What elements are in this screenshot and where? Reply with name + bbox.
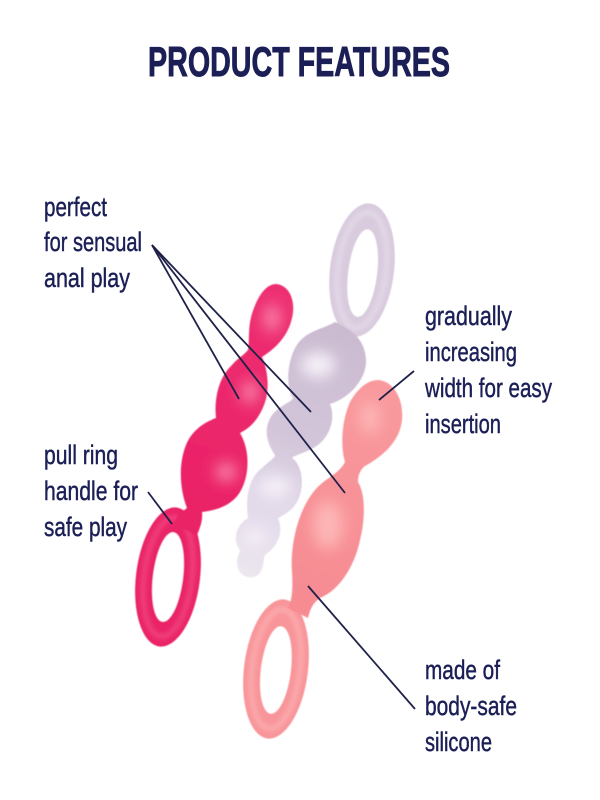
label: gradually increasing width for easy insertion: increasing: [425, 337, 517, 367]
label: pull ring handle for safe play: safe play: [44, 512, 127, 542]
leader line: pull ring handle: [148, 492, 172, 524]
label: perfect for sensual anal play: [44, 192, 142, 293]
label: gradually increasing width for easy insertion: gradually: [425, 301, 512, 331]
product: salmon plug: [236, 380, 402, 742]
magenta highlights: [215, 304, 281, 482]
label: made of body-safe silicone: made of: [425, 655, 500, 685]
label: perfect for sensual anal play: perfect: [44, 192, 107, 222]
magenta pull ring: [128, 504, 208, 650]
label: perfect for sensual anal play: for sensual: [44, 227, 142, 257]
product: lilac twisted plug: [236, 200, 402, 577]
label: made of body-safe silicone: [425, 655, 517, 757]
lilac highlights: [244, 352, 335, 546]
salmon highlights: [313, 402, 380, 549]
label: made of body-safe silicone: body-safe: [425, 691, 517, 721]
salmon body: [288, 380, 402, 618]
lilac twisted body: [236, 322, 366, 577]
label: pull ring handle for safe play: [44, 440, 138, 542]
leader line: gradually increasing width: [379, 371, 414, 400]
salmon pull ring: [236, 596, 316, 742]
label: gradually increasing width for easy insertion: insertion: [425, 409, 501, 439]
leader lines: perfect for sensual anal play: [152, 245, 345, 493]
magenta body: [175, 284, 293, 535]
label: gradually increasing width for easy insertion: [424, 301, 552, 439]
label: pull ring handle for safe play: handle for: [44, 476, 138, 506]
label: made of body-safe silicone: silicone: [425, 727, 492, 757]
label: pull ring handle for safe play: pull ring: [44, 440, 118, 470]
label: gradually increasing width for easy insertion: width for easy: [424, 373, 552, 403]
label: perfect for sensual anal play: anal play: [44, 263, 130, 293]
product: magenta beaded plug: [128, 284, 293, 650]
leader line: body-safe silicone: [308, 586, 415, 709]
lilac pull ring: [322, 200, 402, 340]
title: PRODUCT FEATURES: [148, 38, 450, 85]
